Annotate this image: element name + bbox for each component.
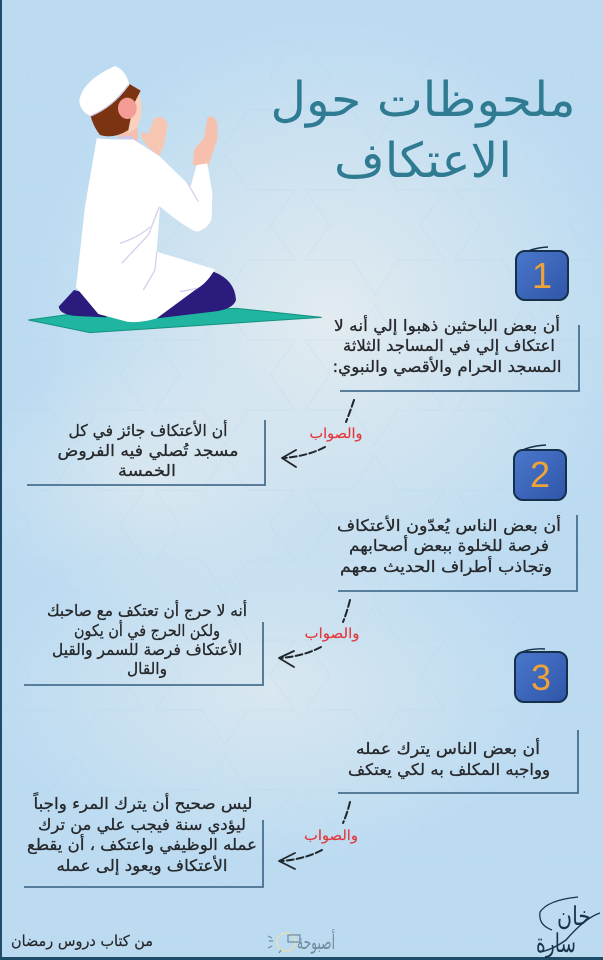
panel: correction 3 bbox=[24, 791, 263, 887]
arrow with label: correction 3 bbox=[279, 802, 358, 869]
arrow with label: correction 1: والصواب bbox=[310, 426, 362, 442]
raised near hand bbox=[193, 116, 217, 167]
number badge 1 bbox=[516, 247, 568, 300]
panel: correction 1: مسجد تُصلي فيه الفروض bbox=[58, 441, 238, 461]
number badge 2: 2 bbox=[530, 454, 550, 495]
panel: correction 1: أن الأعتكاف جائز في كل bbox=[68, 420, 228, 441]
panel: mistake 2: أن بعض الناس يُعدّون الأعتكاف bbox=[337, 515, 561, 536]
panel: mistake 2: فرصة للخلوة ببعض أصحابهم bbox=[349, 535, 549, 556]
arrow with label: correction 2 bbox=[279, 600, 360, 667]
title bbox=[270, 72, 576, 189]
hair bbox=[91, 83, 141, 136]
panel: mistake 1: اعتكاف إلي في المساجد الثلاثة bbox=[343, 336, 555, 356]
logo: Osbouha: أصبوحة bbox=[297, 929, 335, 954]
panel: mistake 2: وتجاذب أطراف الحديث معهم bbox=[340, 556, 552, 577]
robe folds bbox=[120, 182, 198, 292]
signature: Sarah Khan bbox=[536, 897, 600, 959]
title: الاعتكاف bbox=[334, 133, 512, 189]
arrow with label: correction 2: والصواب bbox=[304, 626, 360, 642]
number badge 2 bbox=[514, 445, 566, 500]
source note: من كتاب دروس رمضان bbox=[11, 932, 153, 950]
title: ملحوظات حول bbox=[270, 72, 576, 128]
ear bbox=[118, 98, 137, 119]
panel: mistake 1: المسجد الحرام والأقصي والنبوي: bbox=[332, 356, 562, 377]
panel: correction 2: والقال bbox=[127, 659, 167, 679]
panel: correction 2: ولكن الحرج في أن يكون bbox=[74, 620, 220, 641]
robe bbox=[76, 138, 215, 322]
panel: correction 3: عمله الوظيفي واعتكف ، أن يقطع bbox=[27, 834, 257, 855]
panel: mistake 3: وواجبه المكلف به لكي يعتكف bbox=[348, 760, 550, 780]
raised far hand bbox=[142, 117, 168, 156]
panel: correction 3: ليؤدي سنة فيجب علي من ترك bbox=[38, 815, 246, 835]
number badge 1: 1 bbox=[532, 255, 552, 296]
face bbox=[128, 91, 141, 133]
arrow with label: correction 1 bbox=[282, 400, 362, 467]
panel: correction 2 bbox=[24, 600, 263, 685]
panel: mistake 2 bbox=[337, 515, 577, 591]
neck bbox=[118, 122, 138, 140]
panel: correction 1: الخمسة bbox=[118, 461, 176, 480]
number badge 3 bbox=[515, 649, 567, 702]
panel: mistake 3: أن بعض الناس يترك عمله bbox=[356, 738, 540, 759]
prayer mat bbox=[28, 308, 322, 333]
collar bbox=[117, 135, 142, 143]
panel: correction 2: أنه لا حرج أن تعتكف مع صاحبك bbox=[47, 600, 247, 621]
signature: Sarah Khan: سارة bbox=[536, 929, 576, 959]
panel: correction 1 bbox=[27, 420, 265, 485]
panel: mistake 3 bbox=[338, 730, 578, 793]
signature: Sarah Khan: خان bbox=[557, 902, 591, 932]
illustration: man praying on a mat bbox=[28, 66, 322, 333]
panel: correction 2: الأعتكاف فرصة للسمر والقيل bbox=[52, 639, 242, 660]
panel: correction 3: ليس صحيح أن يترك المرء واجباً bbox=[33, 791, 252, 814]
legs bbox=[59, 272, 236, 318]
logo: Osbouha bbox=[268, 929, 335, 954]
number badge 3: 3 bbox=[531, 657, 551, 698]
cap bbox=[79, 66, 129, 116]
panel: mistake 1: أن بعض الباحثين ذهبوا إلي أنه لا bbox=[334, 315, 560, 336]
panel: mistake 1 bbox=[332, 315, 579, 391]
panel: correction 3: الأعتكاف ويعود إلى عمله bbox=[56, 855, 228, 876]
arrow with label: correction 3: والصواب bbox=[304, 828, 358, 844]
